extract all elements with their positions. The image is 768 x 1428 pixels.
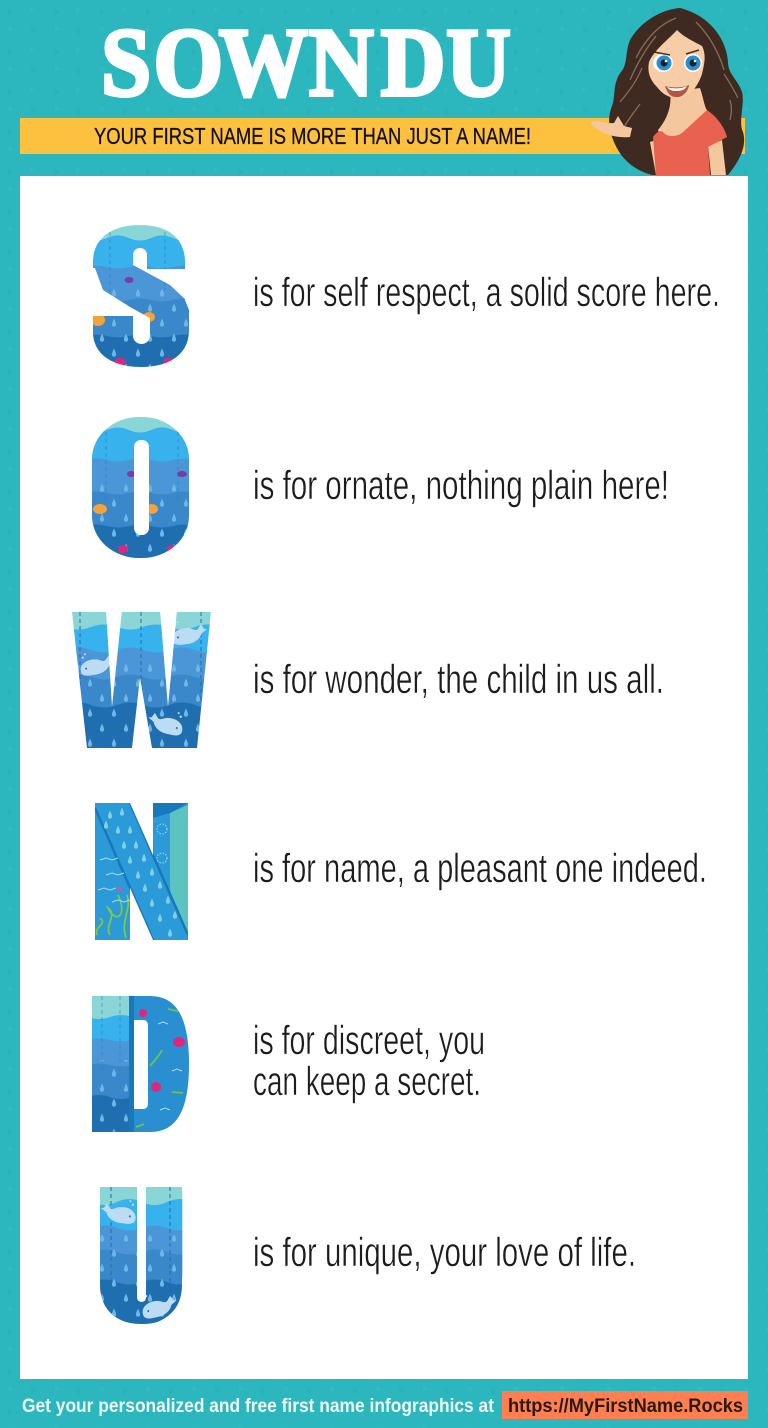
white content panel (20, 176, 748, 1379)
arm and hand (590, 116, 632, 137)
text: D lines: is for discreet, you (253, 1017, 485, 1063)
hair (609, 8, 744, 175)
tagline banner (20, 118, 745, 154)
row 6: letter U and text (92, 1182, 636, 1330)
tagline text: YOUR FIRST NAME IS MORE THAN JUST A NAME! (94, 123, 531, 149)
smile (665, 85, 689, 97)
title: SOWNDU (101, 10, 511, 117)
row 1: letter S and text (85, 220, 720, 370)
footer text: Get your personalized and free first name infographics at (22, 1396, 495, 1417)
eyes (653, 50, 702, 72)
neck and chest (658, 88, 708, 136)
icon: letter N (95, 803, 188, 940)
icon: letter S (93, 225, 189, 367)
text: D lines (253, 1017, 485, 1104)
face (648, 30, 705, 98)
shirt (653, 110, 727, 175)
row 2: letter O and text (92, 417, 666, 558)
footer (22, 1391, 748, 1419)
row 5: letter D and two-line text (92, 996, 484, 1132)
icon: letter U (100, 1187, 182, 1324)
icon: letter D (92, 996, 189, 1132)
cartoon woman illustration (590, 8, 744, 175)
row 4: letter N and text (90, 800, 707, 945)
icon: letter O (92, 417, 189, 558)
footer link badge: https://MyFirstName.Rocks (508, 1396, 743, 1417)
text: D lines: can keep a secret. (253, 1058, 481, 1104)
row 3: letter W and text (72, 612, 662, 748)
icon: letter W (72, 612, 211, 748)
